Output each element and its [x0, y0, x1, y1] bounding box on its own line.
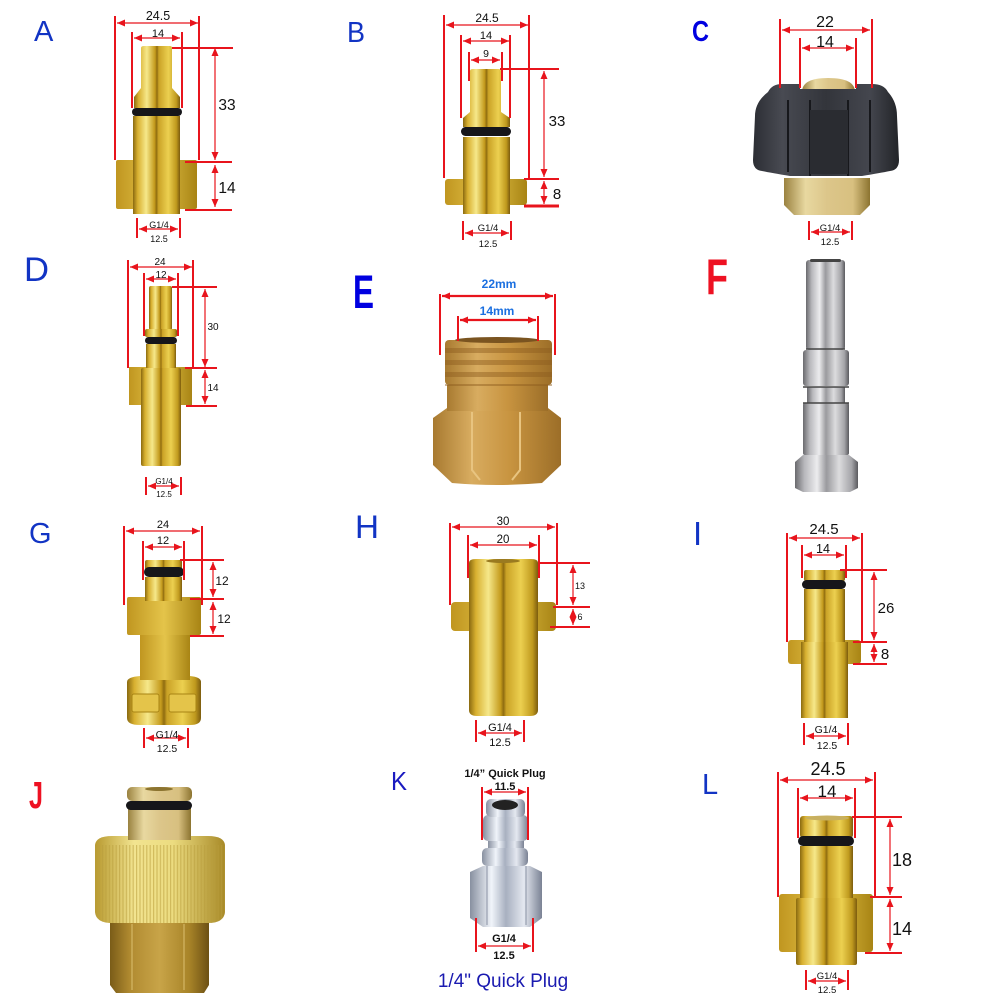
label B: B: [347, 17, 365, 49]
dimension lines C: [780, 14, 872, 248]
dimension lines I: 24.5: [809, 521, 839, 538]
dimension lines E: 14mm: [480, 304, 514, 318]
dimension lines H: [450, 516, 590, 749]
dimension lines D: G1/4: [155, 477, 173, 486]
panel: adapter L: [702, 759, 912, 996]
panel: adapter K: [391, 766, 568, 992]
label D: D: [24, 251, 49, 289]
panel: adapter E: [353, 265, 561, 485]
dimension lines B: 33: [549, 113, 565, 130]
dimension lines H: 13: [575, 581, 585, 591]
dimension lines C: 14: [816, 34, 834, 51]
dimension lines K: [464, 768, 546, 962]
panel: adapter A: [34, 9, 236, 244]
dimension lines I: [787, 521, 894, 752]
dimension lines D: 24: [154, 257, 166, 268]
dimension lines G: 24: [157, 519, 169, 531]
dimension lines E: 22mm: [482, 277, 516, 291]
dimension lines D: 12.5: [156, 490, 172, 499]
label L: L: [702, 769, 718, 801]
dimension lines G: 12.5: [157, 743, 177, 755]
dimension lines L: 12.5: [818, 985, 836, 996]
panel: adapter J: [29, 775, 225, 993]
dimension lines I: 8: [881, 646, 889, 663]
dimension lines I: G1/4: [815, 724, 838, 736]
dimension lines C: G1/4: [820, 223, 840, 234]
label H: H: [355, 509, 379, 545]
dimension lines C: 22: [816, 14, 834, 31]
dimension lines G: 12: [215, 574, 229, 588]
dimension lines G: [124, 519, 231, 755]
dimension lines D: 12: [155, 270, 167, 281]
dimension lines B: [444, 11, 565, 250]
icon: steel fitting F: [795, 259, 858, 492]
dimension lines H: 20: [497, 534, 509, 546]
dimension lines K: G1/4: [492, 933, 517, 945]
dimension lines C: 12.5: [821, 237, 839, 248]
dimension lines H: G1/4: [488, 722, 512, 734]
dimension lines B: 24.5: [475, 11, 499, 25]
dimension lines L: 24.5: [810, 759, 846, 779]
icon: brass fitting H: [451, 559, 556, 716]
dimension lines K: 11.5: [495, 781, 515, 793]
dimension lines L: 14: [818, 782, 836, 801]
panel: adapter F: [706, 249, 858, 492]
dimension lines A: 14: [152, 28, 164, 40]
label A: A: [34, 16, 54, 48]
dimension lines E: [440, 277, 555, 355]
label K: K: [391, 766, 408, 796]
label I: I: [693, 515, 702, 552]
dimension lines D: [128, 257, 219, 499]
label C: C: [692, 16, 709, 48]
dimension lines H: 12.5: [489, 737, 511, 749]
icon: silver quick plug K: [470, 799, 542, 927]
dimension lines I: 12.5: [817, 740, 837, 752]
label E: E: [353, 265, 374, 318]
dimension lines L: [778, 759, 912, 996]
dimension lines B: 9: [483, 48, 489, 60]
dimension lines H: 30: [497, 516, 509, 528]
dimension lines B: G1/4: [478, 223, 498, 234]
panel: adapter H: [355, 509, 590, 749]
dimension lines A: 24.5: [146, 9, 170, 23]
icon: black nut fitting C: [753, 78, 899, 215]
dimension lines A: 33: [218, 97, 236, 114]
icon: knurled brass fitting J: [95, 787, 225, 993]
dimension lines D: 14: [207, 383, 219, 394]
dimension lines B: 12.5: [479, 239, 497, 250]
dimension lines A: 14: [218, 180, 236, 197]
icon: brass fitting L: [779, 816, 873, 965]
dimension lines L: 18: [892, 850, 912, 870]
dimension lines K: 12.5: [493, 950, 515, 962]
label G: G: [29, 518, 52, 550]
dimension lines G: 12: [217, 612, 231, 626]
icon: threaded brass fitting E: [433, 337, 561, 485]
panel: adapter G: [29, 518, 231, 755]
icon: brass fitting B: [445, 69, 527, 214]
dimension lines G: 12: [157, 535, 169, 547]
dimension lines A: G1/4: [149, 220, 169, 230]
icon: brass fitting I: [788, 570, 861, 718]
dimension lines B: 8: [553, 186, 561, 203]
panel: adapter B: [347, 11, 565, 250]
dimension lines H: 6: [577, 612, 583, 622]
caption: quick plug: 1/4" Quick Plug: [438, 971, 568, 992]
icon: brass fitting G: [127, 560, 201, 725]
label J: J: [29, 775, 43, 817]
panel: adapter C: [692, 14, 899, 248]
dimension lines K: 1/4” Quick Plug: [464, 768, 546, 780]
panel: adapter D: [24, 251, 219, 499]
dimension lines I: 26: [878, 600, 894, 617]
dimension lines G: G1/4: [156, 729, 179, 741]
dimension lines A: [115, 9, 236, 244]
icon: brass fitting A: [116, 46, 197, 214]
icon: brass fitting D: [129, 286, 192, 466]
dimension lines L: G1/4: [817, 971, 837, 982]
dimension lines D: 30: [207, 322, 219, 333]
panel: adapter I: [693, 515, 894, 752]
dimension lines B: 14: [480, 30, 492, 42]
dimension lines A: 12.5: [150, 234, 168, 244]
dimension lines I: 14: [816, 542, 830, 556]
dimension lines L: 14: [892, 919, 912, 939]
label F: F: [706, 249, 728, 305]
